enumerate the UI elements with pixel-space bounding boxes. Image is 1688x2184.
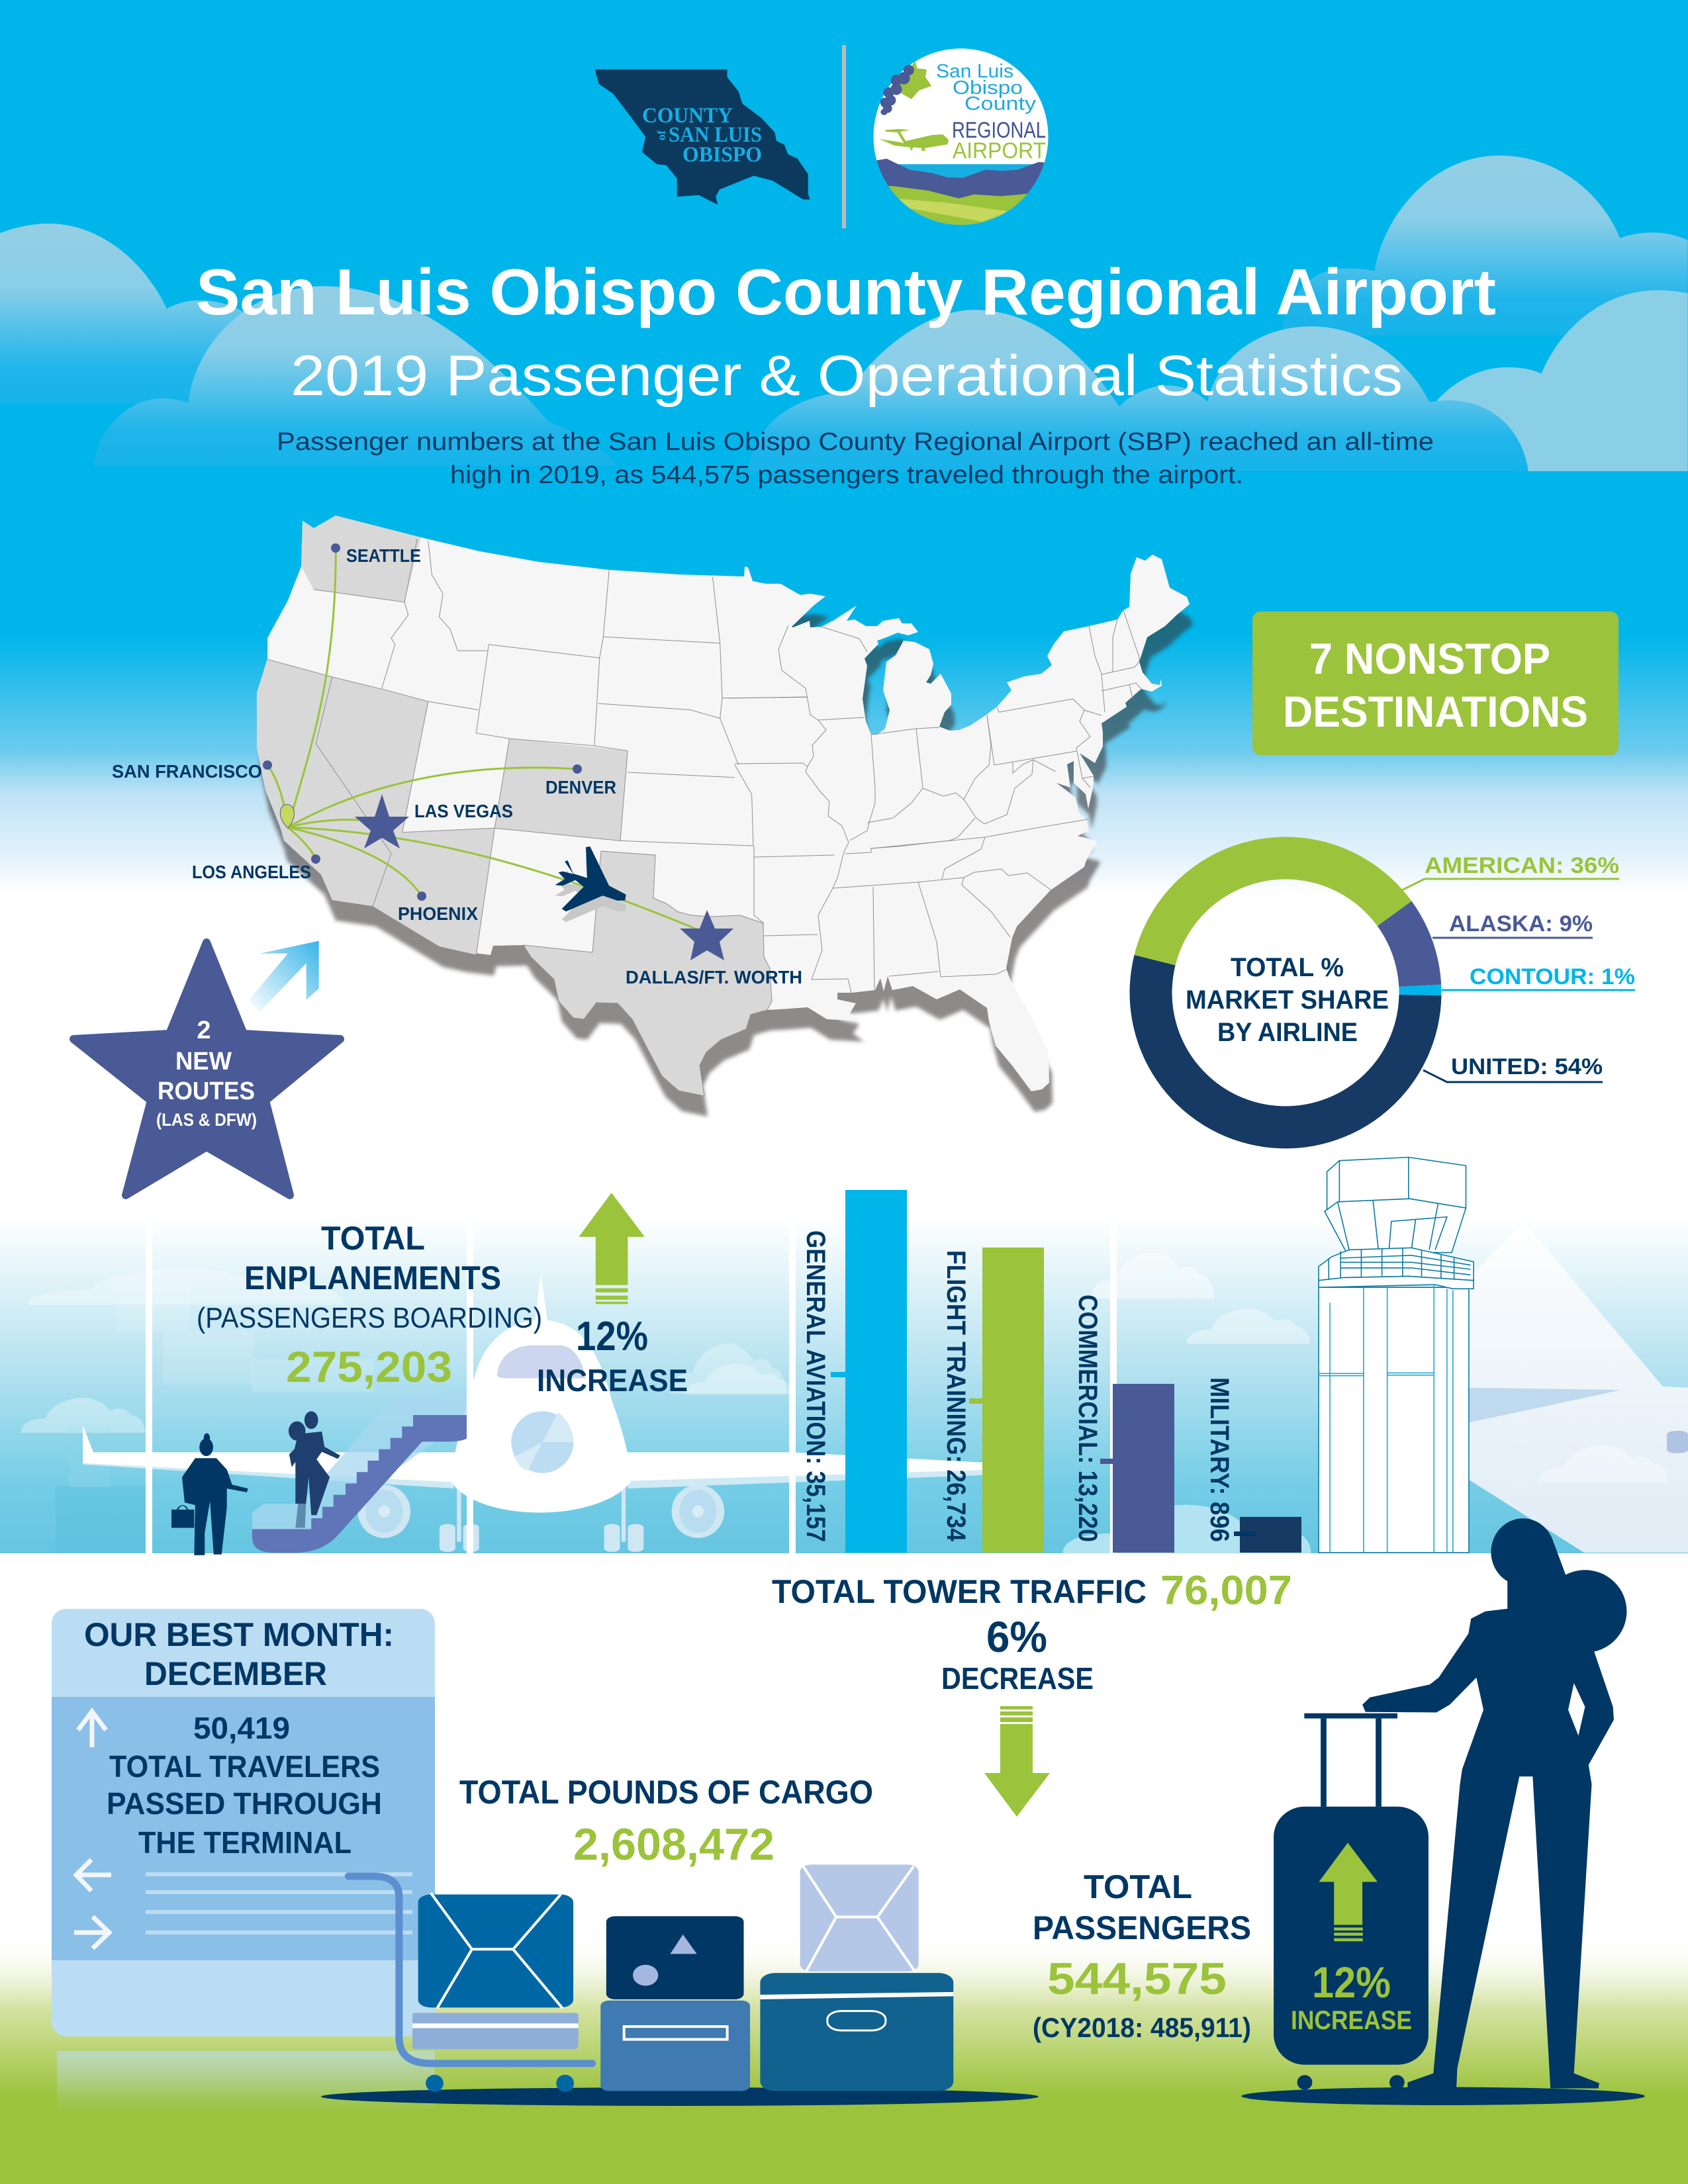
map city labels: LOS ANGELES [192, 862, 311, 882]
bar: flight training [941, 1248, 1044, 1553]
panel body text: PASSED THROUGH [107, 1786, 382, 1821]
heading: total pounds of cargo: 2,608,472 [573, 1819, 774, 1870]
Dallas star [680, 910, 733, 960]
suitcase increase label: INCREASE [1291, 2006, 1412, 2035]
lower section ground gradient [0, 1933, 1688, 2184]
panel body text [107, 1711, 382, 1860]
route map of the United States [112, 516, 1193, 1116]
stair steps [252, 1415, 473, 1553]
bar chart: tower traffic by category [801, 1190, 1301, 1553]
figure [1362, 1518, 1626, 2089]
cart wheels [426, 2075, 574, 2092]
window mullions [146, 1221, 1117, 1553]
map land [257, 516, 1190, 1096]
heading: total passengers: PASSENGERS [1033, 1909, 1251, 1946]
label: Alaska: ALASKA: 9% [1449, 911, 1593, 936]
state borders east and south [728, 610, 1141, 993]
logo: county of San Luis Obispo: of [655, 130, 668, 140]
plane on route [555, 846, 626, 922]
logo: county of San Luis Obispo: SAN LUIS [669, 123, 762, 147]
airstairs [252, 1390, 473, 1553]
navy case [606, 1916, 744, 1999]
logo: regional airport: Obispo [953, 77, 1023, 99]
logo: county of San Luis Obispo: OBISPO [682, 143, 762, 167]
tower traffic total: 6% [986, 1612, 1047, 1661]
map city labels: PHOENIX [398, 903, 478, 924]
middle box [600, 2001, 750, 2091]
logo: regional airport: County [964, 93, 1037, 114]
enplanements increase: 12% [576, 1314, 648, 1359]
destination dots [263, 543, 582, 901]
light suitcase [800, 1864, 919, 1972]
traveler: woman on stairs [289, 1411, 340, 1528]
label: United: UNITED: 54% [1451, 1054, 1603, 1079]
segment: United [1130, 955, 1442, 1148]
luggage cart illustration [348, 1864, 953, 2092]
flight routes [267, 548, 708, 934]
panel direction arrows [74, 1711, 111, 1948]
large trunk [760, 1973, 953, 2091]
blue suitcase [418, 1893, 573, 2009]
logo divider [842, 45, 846, 228]
SBP pin [280, 805, 294, 828]
logo: county of San Luis Obispo [595, 69, 810, 205]
window scene: background skyline and clouds [21, 1252, 1311, 1553]
panel heading: OUR BEST MONTH: [84, 1616, 394, 1653]
enplanements increase [537, 1314, 688, 1398]
heading: total pounds of cargo [459, 1774, 873, 1870]
bar: commercial: COMMERCIAL: 13,220 [1073, 1295, 1102, 1542]
suitcase arrow [1319, 1843, 1378, 1941]
cart frame [348, 1876, 592, 2064]
logo: regional airport: San Luis [936, 61, 1013, 82]
new routes star [73, 942, 340, 1195]
map city labels: SAN FRANCISCO [112, 761, 262, 782]
intro paragraph: high in 2019, as 544,575 passengers traveled through the airport. [450, 461, 1243, 489]
wing [83, 1425, 997, 1484]
donut chart: market share by airline [1130, 837, 1635, 1148]
bar: general aviation [801, 1190, 907, 1553]
fin [534, 1273, 549, 1330]
label: American: AMERICAN: 36% [1425, 853, 1619, 878]
bar: military: MILITARY: 896 [1205, 1377, 1234, 1542]
nose pie [511, 1411, 573, 1473]
traveler with suitcase silhouette [1241, 1518, 1645, 2105]
highlighted western states [257, 516, 628, 955]
map city labels: DALLAS/FT. WORTH [626, 967, 802, 987]
logo: regional airport: AIRPORT [953, 138, 1046, 163]
sky background [0, 0, 1688, 893]
suitcase increase label: 12% [1312, 1958, 1391, 2007]
segment: Alaska [1378, 901, 1441, 987]
heading: total passengers: TOTAL [1084, 1868, 1192, 1905]
tower traffic total: TOTAL TOWER TRAFFIC [772, 1573, 1147, 1610]
cockpit window [497, 1345, 586, 1379]
highlighted state: Texas [524, 851, 772, 1096]
luggage ground shadow [321, 2087, 1039, 2106]
traveler: man with briefcase [171, 1433, 248, 1555]
bar: flight training: FLIGHT TRAINING: 26,734 [941, 1250, 970, 1542]
label: American [1402, 853, 1619, 890]
subtitle: 2019 Passenger & Operational Statistics [291, 344, 1403, 408]
bar: general aviation: GENERAL AVIATION: 35,157 [801, 1230, 830, 1542]
heading: total passengers: (CY2018: 485,911) [1033, 2012, 1251, 2043]
panel sign lines [146, 1872, 412, 1934]
heading: total enplanements: 275,203 [286, 1342, 452, 1391]
ground shadow [1241, 2087, 1645, 2105]
panel body text: THE TERMINAL [138, 1825, 352, 1860]
logo: regional airport: REGIONAL [952, 118, 1046, 143]
tower traffic total [772, 1568, 1292, 1696]
heading: total enplanements: (PASSENGERS BOARDING) [197, 1302, 542, 1334]
donut centre label: MARKET SHARE [1186, 985, 1389, 1015]
new routes star: ROUTES [158, 1077, 255, 1105]
intro paragraph: Passenger numbers at the San Luis Obispo County Regional Airport (SBP) reached an all-time [277, 428, 1434, 456]
intro paragraph [277, 428, 1434, 489]
heading: total pounds of cargo: TOTAL POUNDS OF CARGO [459, 1774, 873, 1811]
map city labels: LAS VEGAS [414, 801, 513, 821]
hip gap [1568, 1683, 1585, 1736]
logo: county of San Luis Obispo: COUNTY [642, 104, 733, 128]
Las Vegas star [355, 794, 409, 848]
panel heading [84, 1616, 394, 1692]
new routes star: 2 [197, 1017, 211, 1044]
terminal window scene background [0, 1218, 1688, 1553]
aircraft front view [83, 1273, 997, 1552]
heading: total passengers [1033, 1868, 1251, 2043]
new routes arrow [249, 941, 319, 1012]
title: San Luis Obispo County Regional Airport [196, 255, 1496, 328]
donut centre label: TOTAL % [1231, 953, 1344, 982]
heading: total enplanements: TOTAL [321, 1220, 425, 1257]
heading: total enplanements: ENPLANEMENTS [244, 1259, 501, 1297]
heading: total enplanements [197, 1220, 542, 1391]
enplanements increase: INCREASE [537, 1363, 688, 1398]
segment: Contour [1399, 985, 1442, 995]
suitcase increase label [1291, 1958, 1412, 2035]
map city labels: SEATTLE [346, 545, 421, 566]
callout: 7 nonstop destinations: 7 NONSTOP [1309, 634, 1550, 683]
enplanements up arrow [579, 1193, 645, 1304]
landing gear [440, 1488, 643, 1552]
map city labels [112, 545, 802, 987]
segment: American [1135, 837, 1411, 965]
logo: regional airport [872, 48, 1050, 226]
suitcase [1274, 1713, 1429, 2090]
donut centre label [1186, 953, 1389, 1047]
label: Contour: CONTOUR: 1% [1470, 964, 1635, 989]
tower traffic down arrow [984, 1706, 1050, 1817]
sky clouds [0, 156, 1688, 471]
new routes star: (LAS & DFW) [156, 1110, 257, 1130]
callout: 7 nonstop destinations [1252, 612, 1618, 755]
tower traffic total: DECREASE [941, 1661, 1094, 1696]
control tower [1319, 1158, 1474, 1553]
tower traffic total: 76,007 [1160, 1568, 1292, 1614]
donut centre label: BY AIRLINE [1217, 1018, 1358, 1047]
new routes star: NEW [175, 1048, 232, 1075]
cart tray [412, 2013, 579, 2049]
bar: commercial [1073, 1295, 1174, 1553]
map shadow [260, 536, 1193, 1116]
panel: best month [52, 1609, 435, 2115]
map city labels: DENVER [545, 777, 616, 797]
heading: total passengers: 544,575 [1047, 1954, 1227, 2004]
panel heading: DECEMBER [144, 1655, 327, 1692]
engines [357, 1484, 410, 1538]
panel body text: 50,419 [193, 1711, 290, 1745]
state borders west [267, 539, 807, 955]
bar: military [1205, 1377, 1301, 1553]
callout: 7 nonstop destinations: DESTINATIONS [1283, 687, 1588, 736]
large aircraft tail [1469, 1222, 1688, 1553]
panel body text: TOTAL TRAVELERS [109, 1749, 380, 1784]
stair handrail panel [252, 1390, 473, 1529]
fuselage [451, 1320, 631, 1513]
